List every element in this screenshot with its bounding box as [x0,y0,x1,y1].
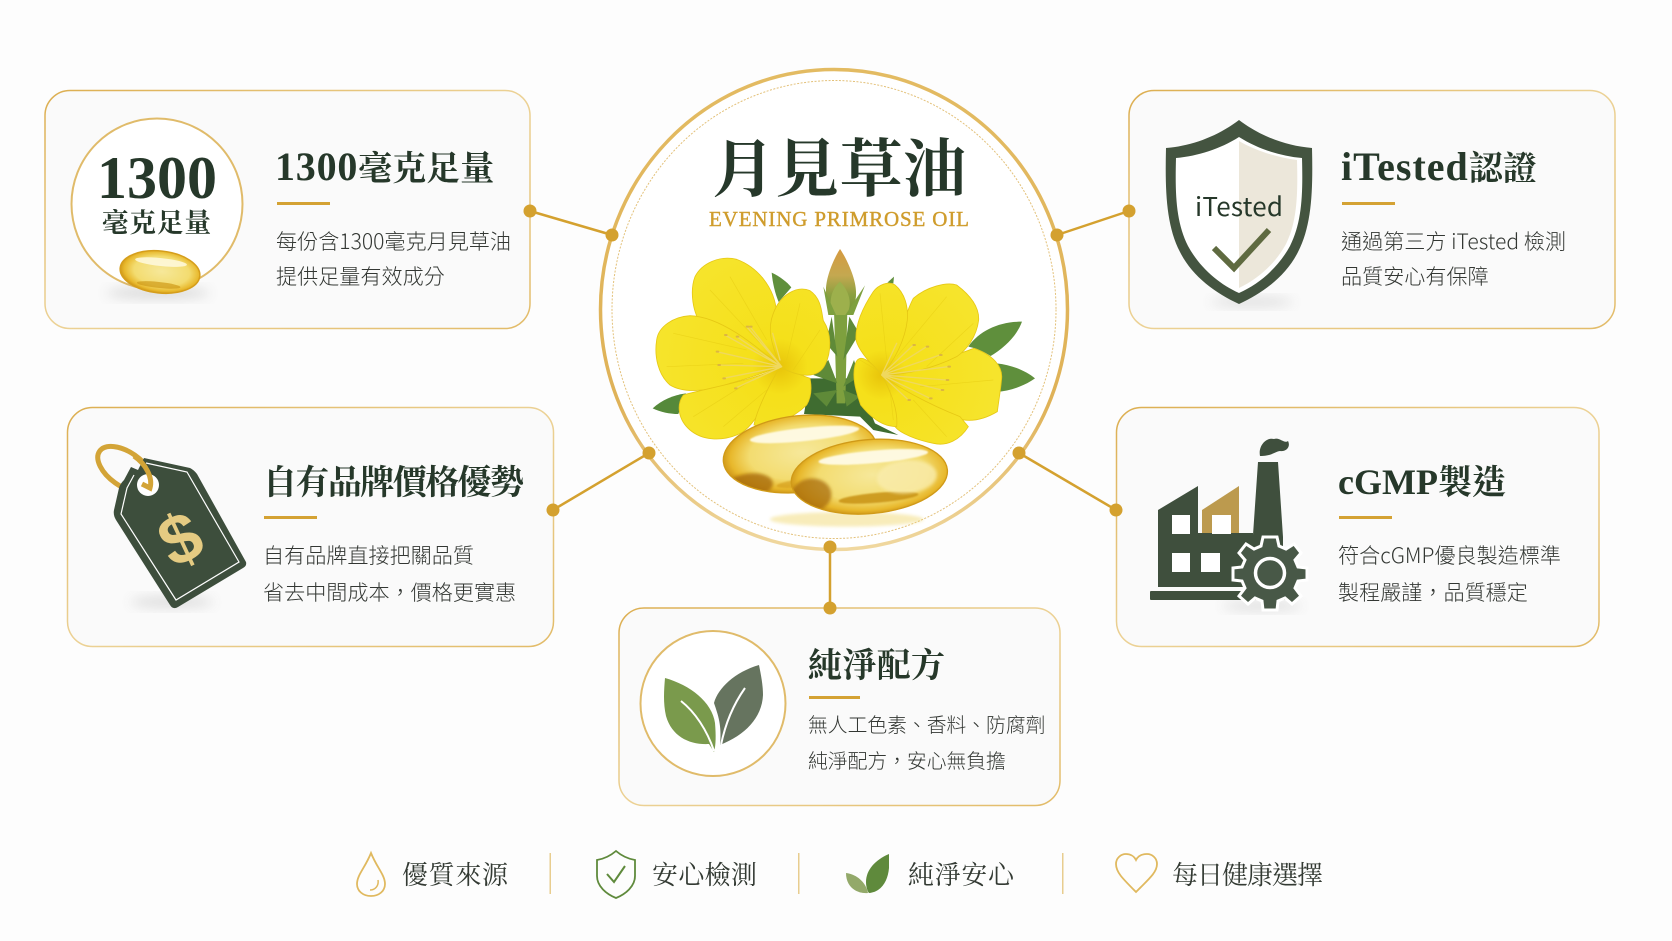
icon: 1300 badge with capsule: 毫克足量 [102,208,212,238]
panel: cGMP manufacturing [1116,408,1599,646]
description: 提供足量有效成分 [276,261,445,291]
description: 無人工色素、香料、防腐劑 [808,709,1045,738]
main title: 月見草油 [712,135,966,205]
footer: value badges [357,851,1323,898]
icon: price tag [90,437,246,608]
description: 符合cGMP優良製造標準 [1338,540,1561,570]
right flower stamens [882,343,950,400]
description: 通過第三方 iTested 檢測 [1341,226,1566,256]
heading: cGMP製造 [1338,462,1506,502]
panel: private-label price advantage [68,408,554,646]
description: 每份含1300毫克月見草油 [276,226,511,256]
central circle: product hero [600,70,1068,550]
icon: price tag: $ [146,495,215,582]
english subtitle: EVENING PRIMROSE OIL [709,207,969,231]
badge: pure peace of mind: 純淨安心 [908,861,1015,890]
heading: 1300毫克足量 [275,144,494,189]
heading: 純淨配方 [808,647,945,685]
icon: twin leaves [640,631,786,776]
leaves [653,273,1035,435]
badge: quality source [357,853,509,896]
badge: daily health: 每日健康選擇 [1172,861,1323,890]
description: 省去中間成本，價格更實惠 [263,577,516,607]
back capsule [722,414,875,494]
right flower veins [860,293,993,437]
badge: pure peace of mind [846,854,1015,893]
panel: pure formula [619,608,1060,806]
left flower veins [667,277,820,427]
description: 自有品牌直接把關品質 [263,540,474,570]
icon: factory with gear [1150,439,1307,610]
connector dots [524,204,1136,614]
connector lines [530,211,1129,608]
icon: shield: iTested [1195,187,1283,224]
icon: 1300 badge with capsule: 1300 [97,145,217,211]
heading: iTested認證 [1341,144,1537,189]
left flower [656,258,830,439]
illustration: evening primrose flowers and capsules [653,249,1035,527]
left flower stamens [717,327,782,388]
description: 純淨配方，安心無負擔 [808,745,1006,774]
badge: quality source: 優質來源 [402,861,509,890]
badge: safety tested [597,851,757,898]
description: 品質安心有保障 [1341,261,1489,291]
front capsule [790,438,948,515]
icon: 1300 badge with capsule [72,118,242,298]
badge: daily health [1116,854,1323,892]
stem and bud [813,249,865,407]
description: 製程嚴謹，品質穩定 [1338,577,1528,607]
panel: iTested certification [1129,90,1615,328]
panel: 1300 mg dosage [45,90,530,328]
capsule shadow [770,512,923,527]
heading: 自有品牌價格優勢 [263,464,524,502]
right flower [854,283,1002,444]
badge: safety tested: 安心檢測 [652,861,757,890]
icon: shield [1166,120,1312,306]
